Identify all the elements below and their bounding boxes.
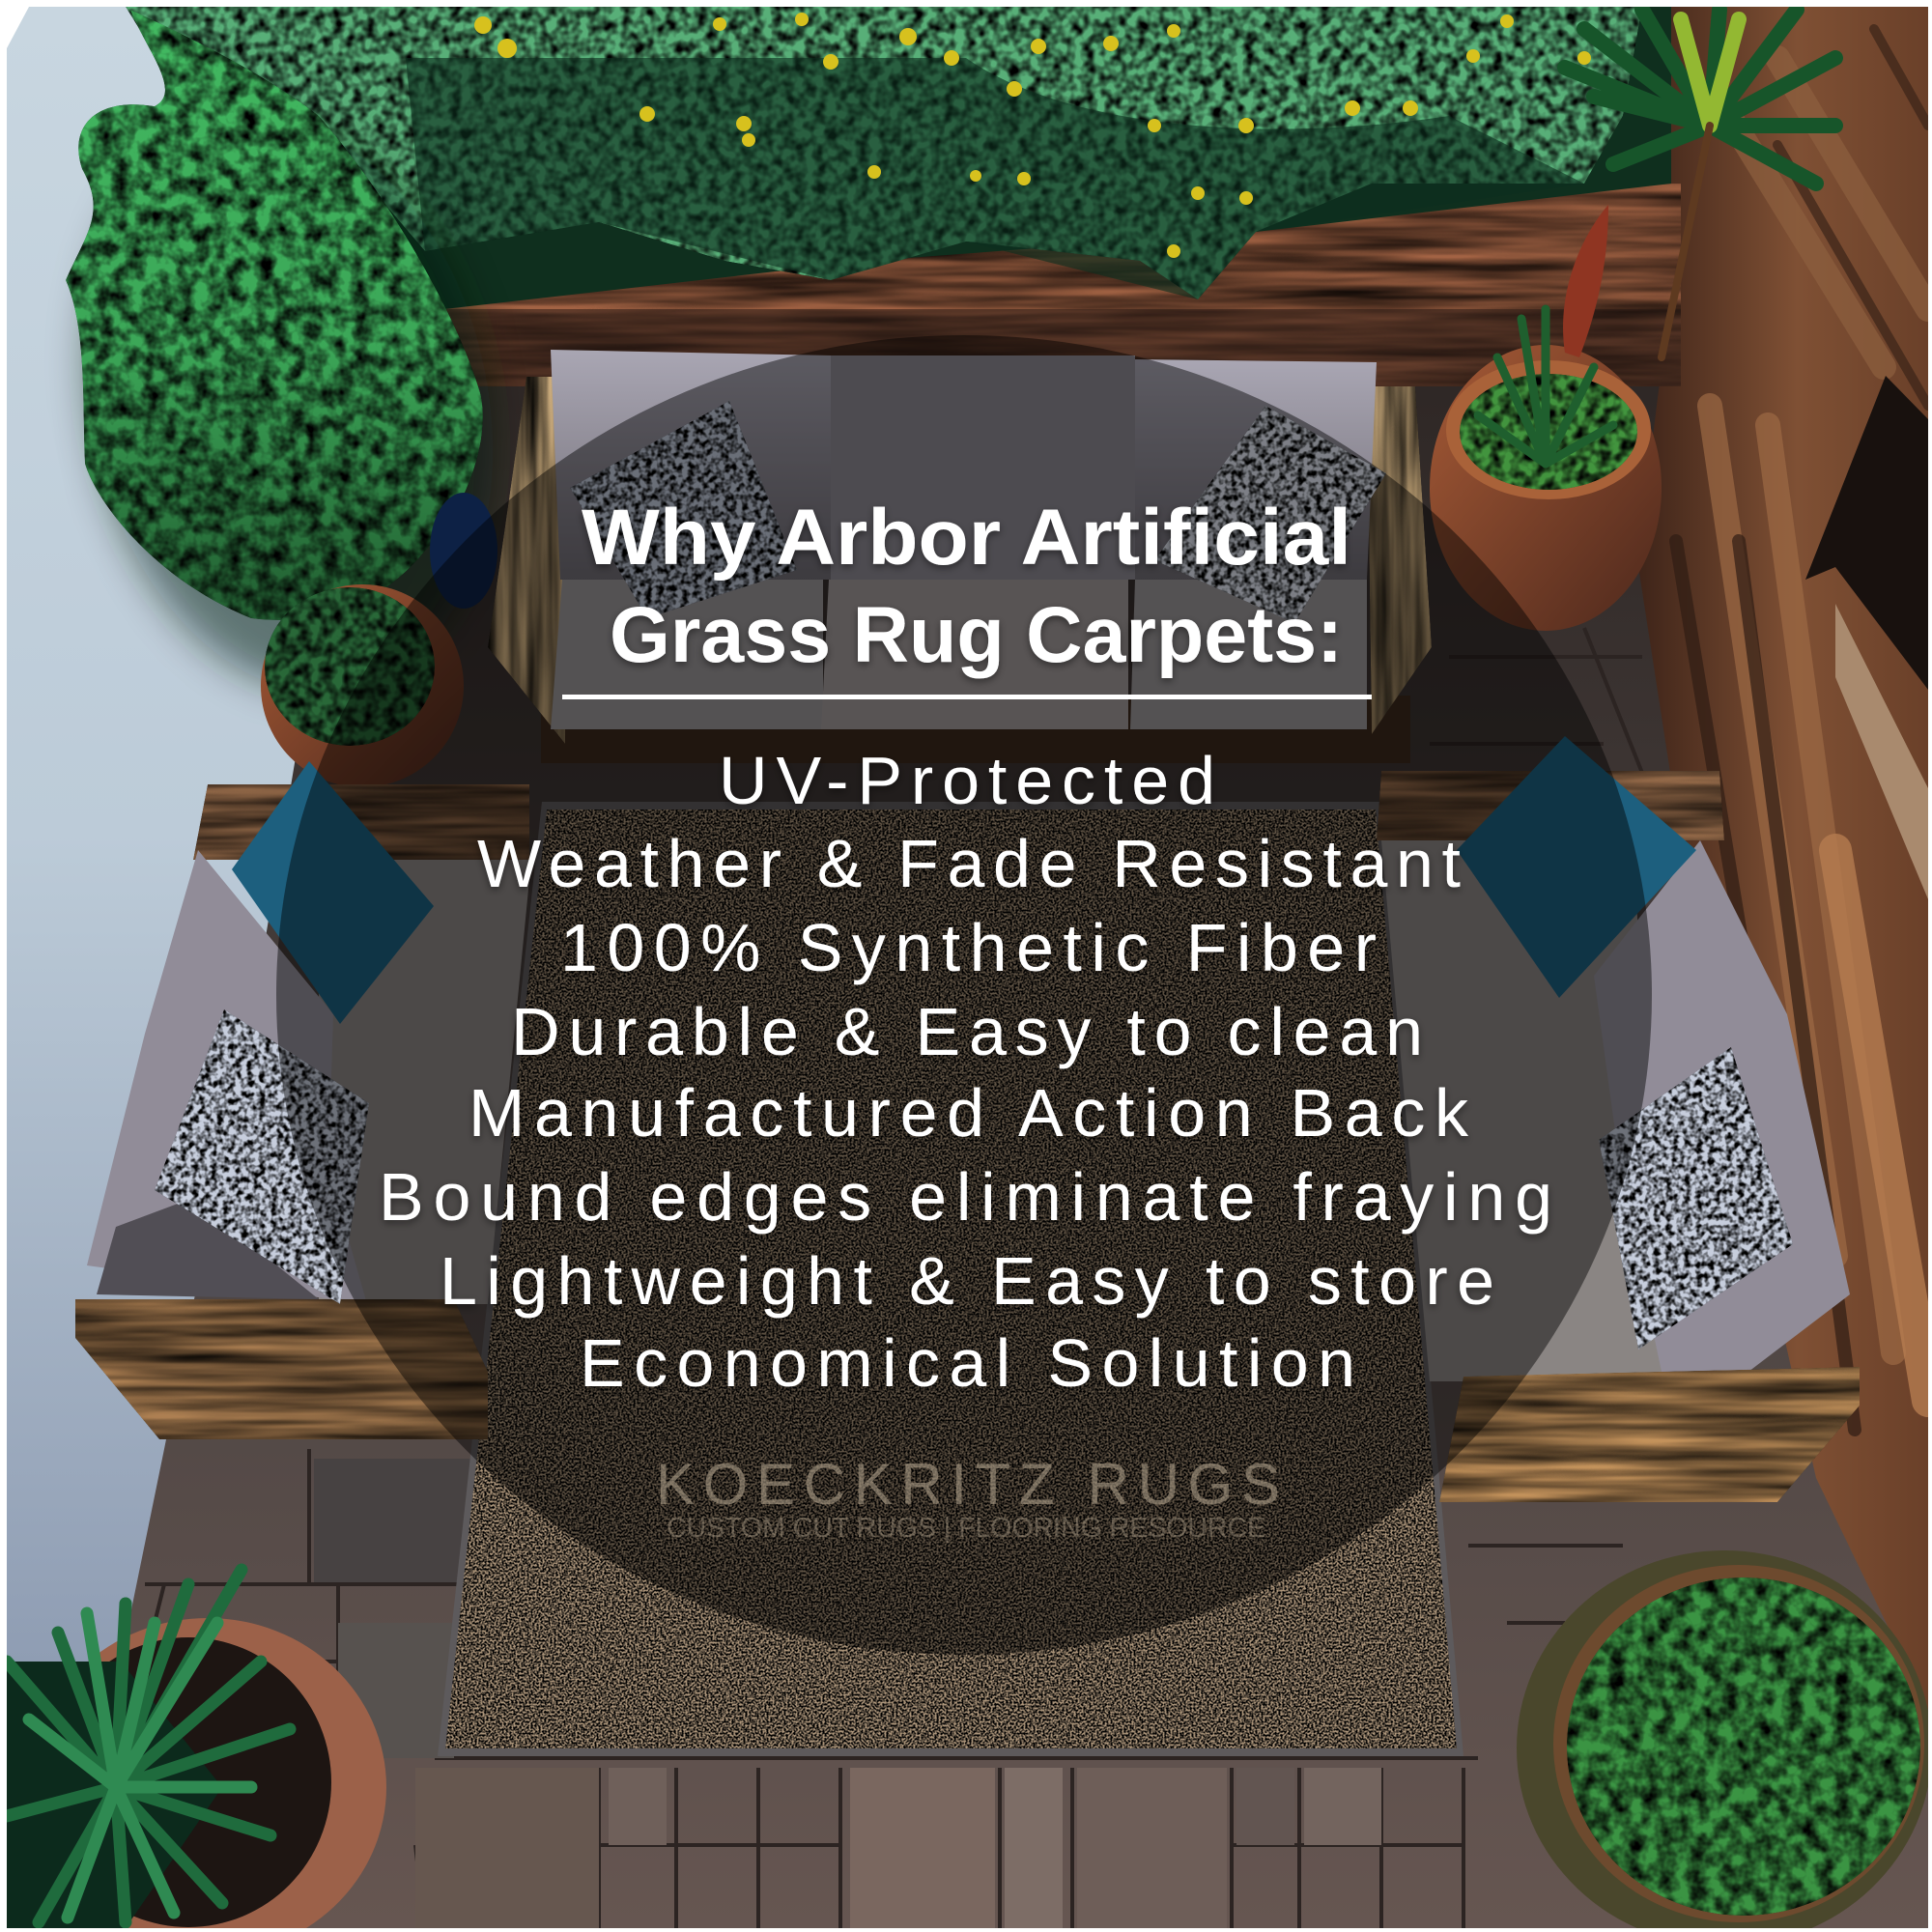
title line 1: Why Arbor Artificial	[582, 494, 1351, 582]
large fern plant, left	[61, 10, 502, 707]
palm, upper right	[1565, 10, 1835, 357]
right arm	[1367, 386, 1432, 734]
feature: durable: Durable & Easy to clean	[511, 994, 1423, 1069]
feature: economical: Economical Solution	[580, 1325, 1355, 1401]
watermark name: KOECKRITZ RUGS	[656, 1452, 1280, 1517]
feature: synthetic fiber: 100% Synthetic Fiber	[560, 910, 1377, 985]
title underline	[562, 695, 1372, 699]
hedge backing	[386, 7, 1671, 309]
watermark tagline: CUSTOM CUT RUGS | FLOORING RESOURCE	[667, 1513, 1265, 1544]
teal pillow	[1457, 736, 1696, 998]
back cushions	[1594, 840, 1850, 1372]
patterned pillow	[155, 1009, 369, 1304]
upper hedge with yellow flowers	[126, 7, 1671, 309]
blue pot behind fern	[430, 493, 497, 609]
right wooden wall	[1637, 7, 1928, 1710]
feature: bound edges: Bound edges eliminate fraying	[379, 1159, 1552, 1235]
top-right terracotta pot with plant	[1430, 205, 1662, 631]
watermark: Koeckritz Rugs	[656, 1452, 1280, 1544]
left arm	[488, 377, 570, 744]
terracotta pot under fern	[261, 584, 464, 787]
title	[582, 494, 1351, 679]
seat	[1381, 840, 1666, 1381]
bottom-right pot with leafy plant	[1517, 1550, 1932, 1932]
bottom frame	[75, 1299, 488, 1439]
lower dark cushion	[97, 1198, 319, 1299]
bottom frame	[1439, 1367, 1860, 1502]
feature: lightweight: Lightweight & Easy to store	[440, 1243, 1494, 1319]
top rail	[193, 784, 529, 860]
seat	[319, 860, 531, 1304]
window	[1805, 376, 1928, 690]
right sofa	[1377, 736, 1860, 1502]
wall planks	[1676, 29, 1928, 1430]
back wooden fence	[435, 184, 1681, 386]
bottom-left pot with spiky plant	[7, 1570, 386, 1932]
flowers	[474, 13, 1591, 258]
seat cushions	[551, 580, 823, 729]
left sofa	[75, 761, 531, 1439]
top rail	[1377, 771, 1724, 840]
dark translucent circle overlay	[276, 335, 1652, 1655]
feature: UV-protected: UV-Protected	[719, 743, 1215, 818]
feature: weather and fade resistant: Weather & Fade Resistant	[477, 826, 1461, 901]
top sofa	[488, 350, 1432, 763]
left wall	[7, 7, 309, 1662]
patterned pillow	[1599, 1047, 1793, 1350]
feature: action back: Manufactured Action Back	[469, 1075, 1469, 1151]
title line 2: Grass Rug Carpets:	[610, 591, 1343, 679]
pillow left	[570, 401, 797, 618]
pillow right	[1154, 406, 1386, 623]
back cushions	[87, 850, 367, 1304]
teal pillow	[232, 761, 434, 1024]
back cushions	[551, 350, 831, 580]
rug	[438, 802, 1463, 1756]
feature list	[379, 743, 1552, 1401]
